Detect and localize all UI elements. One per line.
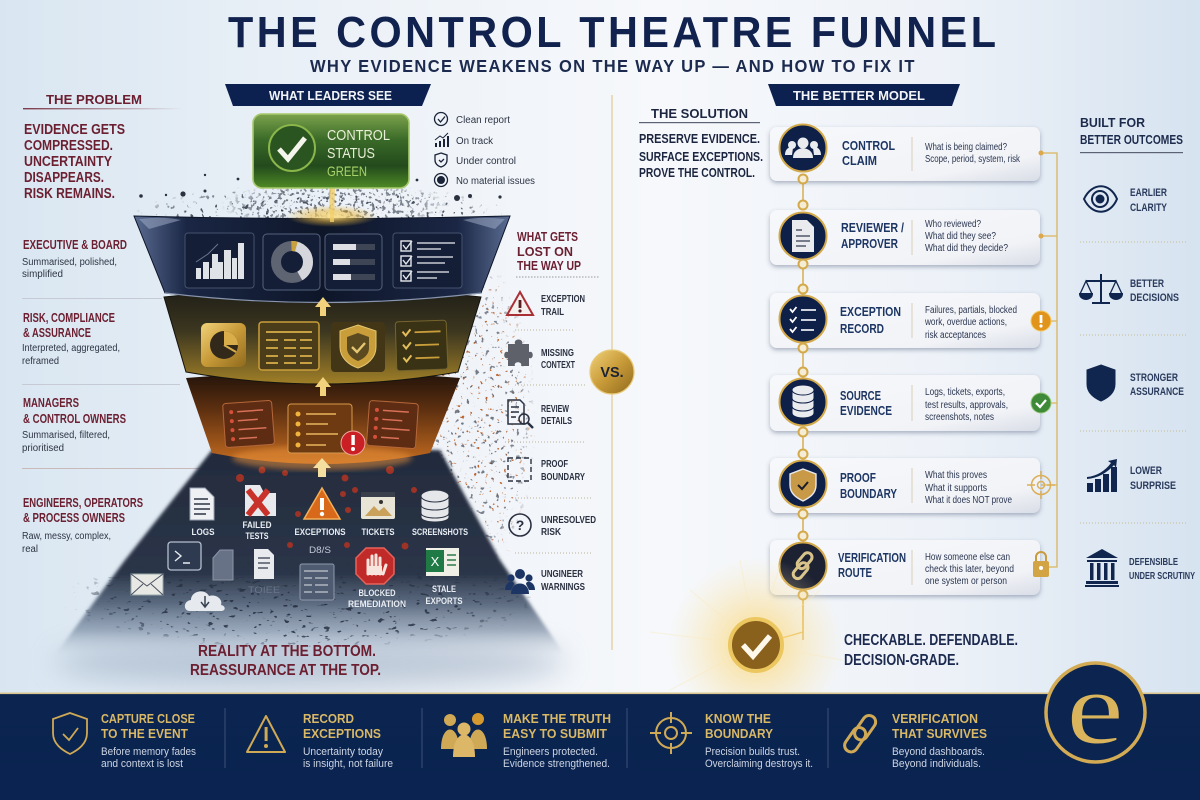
panel: the problem xyxy=(22,92,207,555)
label: stale exports: EXPORTS xyxy=(426,596,462,607)
arrow: upward tier two xyxy=(315,377,331,396)
text: managers and control owners xyxy=(22,396,126,454)
icon: terminal xyxy=(168,542,201,570)
label: missing context xyxy=(541,348,575,371)
heading: the solution: THE SOLUTION xyxy=(651,106,748,121)
text: risk compliance and assurance: & ASSURANCE xyxy=(23,326,91,340)
banner: what leaders see xyxy=(225,84,431,106)
icon: decision-grade gold check xyxy=(650,557,844,733)
label: engineer warnings xyxy=(541,569,585,593)
status card: control status green xyxy=(253,114,409,188)
heading: what gets lost on the way up: WHAT GETS xyxy=(517,230,578,244)
icon: database xyxy=(780,378,826,426)
badge: versus xyxy=(590,350,634,394)
footer item: record exceptions xyxy=(247,711,393,770)
icon: report document xyxy=(254,549,274,579)
step card: control claim: What is being claimed? xyxy=(925,142,1007,153)
label: exception trail xyxy=(541,294,585,318)
icon: exception trail warning xyxy=(507,292,533,315)
label: engineer warnings: WARNINGS xyxy=(541,582,585,593)
icon: warning triangle xyxy=(247,716,285,752)
footer item: verification that survives: THAT SURVIVES xyxy=(892,726,987,741)
panel: gold checklist xyxy=(395,320,448,371)
icon: form list xyxy=(300,564,334,600)
footer item: make the truth easy to submit: Engineers protected. xyxy=(503,746,598,758)
debris: scattered dark specks above funnel xyxy=(139,174,502,201)
footer item: capture close to the event xyxy=(53,711,196,770)
icon: review details document xyxy=(508,400,533,428)
icon: people xyxy=(780,124,826,172)
footer item: make the truth easy to submit: Evidence strengthened. xyxy=(503,758,610,770)
icon: green check badge xyxy=(1031,393,1051,413)
label: lower surprise: LOWER xyxy=(1130,465,1162,477)
heading: what gets lost on the way up: LOST ON xyxy=(517,245,573,259)
debris: dense grey particles under status card xyxy=(222,188,448,218)
step card: control claim xyxy=(770,124,1044,181)
step card: reviewer approver: REVIEWER / xyxy=(841,220,904,235)
logo: gold e xyxy=(1046,651,1145,766)
status card: control status green: GREEN xyxy=(327,163,367,179)
label: failed tests: FAILED xyxy=(242,520,272,531)
footer item: know the boundary: KNOW THE xyxy=(705,711,771,726)
text: checkable defendable decision-grade xyxy=(844,632,1018,669)
step card: source evidence: test results, approvals, xyxy=(925,400,1008,411)
icon: gold padlock xyxy=(1033,552,1049,577)
footer band xyxy=(0,692,1200,800)
label: stale exports: STALE xyxy=(432,584,456,595)
icon: eye xyxy=(1084,186,1117,212)
panel: bar chart xyxy=(185,233,254,288)
step card: source evidence: EVIDENCE xyxy=(840,403,892,418)
label: proof boundary xyxy=(541,459,585,483)
text: risk compliance and assurance: Interpreted, aggregated, xyxy=(22,343,120,354)
heading: what gets lost on the way up: THE WAY UP xyxy=(517,259,581,273)
step card: verification route: ROUTE xyxy=(838,565,872,580)
panel: what gets lost xyxy=(504,230,600,594)
step card: exception record: Failures, partials, blocked xyxy=(925,305,1017,316)
label: proof boundary: BOUNDARY xyxy=(541,472,585,483)
step card: exception record: work, overdue actions, xyxy=(924,317,1007,328)
icon: shield check xyxy=(53,713,87,754)
icon: chain link xyxy=(780,542,826,590)
footer item: capture close to the event: CAPTURE CLOSE xyxy=(101,711,195,726)
step card: exception record: EXCEPTION xyxy=(840,304,901,319)
step card: verification route: one system or person xyxy=(925,576,1007,587)
text: problem statement: DISAPPEARS. xyxy=(24,170,104,186)
icon: engineer warnings people xyxy=(505,569,535,594)
footer item: record exceptions: Uncertainty today xyxy=(303,746,383,758)
label: missing context: CONTEXT xyxy=(541,360,575,371)
text: managers and control owners: prioritised xyxy=(22,443,64,454)
list: leader reassurance signals: Under control xyxy=(456,156,516,167)
icon: gold shield xyxy=(780,460,826,508)
footer item: capture close to the event: and context is lost xyxy=(101,758,183,770)
label: stale exports xyxy=(426,584,462,607)
panel: gold shield xyxy=(331,322,385,372)
step card: control claim: CLAIM xyxy=(842,153,877,168)
text: solution statement: SURFACE EXCEPTIONS. xyxy=(639,150,763,164)
panel: gold table xyxy=(259,322,319,370)
label: better decisions xyxy=(1130,278,1179,304)
icon: no material issues xyxy=(434,174,448,186)
text: engineers operators and process owners: ENGINEERS, OPERATORS xyxy=(23,496,143,510)
panel: donut chart xyxy=(263,234,320,290)
step card: verification route xyxy=(770,540,1049,595)
step card: reviewer approver: Who reviewed? xyxy=(925,219,981,230)
panel: horizontal bars xyxy=(325,234,382,290)
icon: document xyxy=(780,212,826,260)
label: exceptions: EXCEPTIONS xyxy=(294,527,346,538)
banner: what leaders see: WHAT LEADERS SEE xyxy=(269,89,392,103)
list: leader reassurance signals: On track xyxy=(456,136,494,147)
funnel tier: risk and assurance xyxy=(164,288,481,384)
list: leader reassurance signals: No material issues xyxy=(456,176,535,187)
step card: proof boundary: What it supports xyxy=(925,483,987,494)
label: notes: TOIEE xyxy=(248,585,280,595)
label: screenshots: SCREENSHOTS xyxy=(412,527,468,538)
text: solution statement xyxy=(639,132,763,180)
text: engineers operators and process owners: real xyxy=(22,544,38,555)
label: engineer warnings: UNGINEER xyxy=(541,569,584,580)
icon: missing context puzzle xyxy=(504,340,533,366)
icon: tickets image xyxy=(361,492,395,519)
label: proof boundary: PROOF xyxy=(541,459,568,470)
step card: exception record: risk acceptances xyxy=(925,330,986,341)
text: checkable defendable decision-grade: CHECKABLE. DEFENDABLE. xyxy=(844,632,1018,649)
icon: warning badge xyxy=(1031,311,1051,331)
text: problem statement: UNCERTAINTY xyxy=(24,154,112,170)
step card: verification route: How someone else can xyxy=(925,552,1010,563)
label: stronger assurance: STRONGER xyxy=(1130,372,1178,384)
debris: orange particles escaping funnel xyxy=(432,270,535,560)
text: problem statement: EVIDENCE GETS xyxy=(24,122,125,138)
icon: excel file: X xyxy=(431,554,440,569)
label: exception trail: EXCEPTION xyxy=(541,294,585,305)
label: blocked remediation xyxy=(348,588,406,610)
footer item: make the truth easy to submit: MAKE THE TRUTH xyxy=(503,711,611,726)
banner: the better model xyxy=(768,84,960,106)
text: managers and control owners: & CONTROL OWNERS xyxy=(23,412,126,426)
label: stronger assurance xyxy=(1130,372,1184,398)
icon: cloud download xyxy=(185,591,225,611)
step card: proof boundary: What this proves xyxy=(925,470,987,481)
text: executive and board: simplified xyxy=(22,269,63,280)
heading: built for better outcomes xyxy=(1080,116,1183,147)
text: managers and control owners: MANAGERS xyxy=(23,396,79,410)
label: review details: REVIEW xyxy=(541,404,569,415)
panel: built for better outcomes xyxy=(1080,116,1195,587)
panel: manager list left xyxy=(223,400,275,448)
arrow: up flow beam xyxy=(286,188,378,227)
step card: source evidence: SOURCE xyxy=(840,388,881,403)
text: problem statement: COMPRESSED. xyxy=(24,138,113,154)
icon: logs xyxy=(190,488,214,520)
text: risk compliance and assurance: RISK, COMPLIANCE xyxy=(23,311,115,325)
status card: control status green: STATUS xyxy=(327,146,375,162)
footer item: capture close to the event: TO THE EVENT xyxy=(101,726,188,741)
outcome connector: right gold rail xyxy=(1041,153,1057,567)
step card: control claim: CONTROL xyxy=(842,138,895,153)
icon: proof boundary dashed square xyxy=(508,458,531,481)
panel: the solution xyxy=(639,106,763,180)
panel: gold pie chart xyxy=(201,323,246,367)
label: better decisions: BETTER xyxy=(1130,278,1164,290)
step card: source evidence: Logs, tickets, exports, xyxy=(925,387,1005,398)
step card: source evidence xyxy=(770,375,1051,431)
text: executive and board: EXECUTIVE & BOARD xyxy=(23,238,127,252)
icon: target xyxy=(650,712,692,754)
debris: dark particles escaping funnel xyxy=(436,276,534,556)
footer item: know the boundary xyxy=(650,711,813,770)
label: failed tests xyxy=(242,520,272,542)
label: defensible under scrutiny xyxy=(1129,557,1195,582)
text: executive and board xyxy=(22,238,127,280)
label: exception trail: TRAIL xyxy=(541,307,564,318)
step card: reviewer approver xyxy=(770,210,1044,265)
step card: proof boundary: PROOF xyxy=(840,470,876,485)
status card: control status green: CONTROL xyxy=(327,128,390,144)
step card: reviewer approver: APPROVER xyxy=(841,236,898,251)
step card: exception record xyxy=(770,293,1051,348)
heading: the problem: THE PROBLEM xyxy=(46,92,142,107)
panel: checklist xyxy=(393,233,462,288)
icon: stronger shield xyxy=(1087,365,1115,401)
text: engineers operators and process owners xyxy=(22,496,143,555)
label: lower surprise xyxy=(1130,465,1176,492)
footer item: know the boundary: Precision builds trust. xyxy=(705,746,800,758)
text: engineers operators and process owners: & PROCESS OWNERS xyxy=(23,511,125,525)
footer item: verification that survives: Beyond individuals. xyxy=(892,758,981,770)
footer item: record exceptions: EXCEPTIONS xyxy=(303,726,381,741)
footer item: make the truth easy to submit xyxy=(441,711,611,770)
label: failed tests: TESTS xyxy=(246,531,268,542)
label: unresolved risk: RISK xyxy=(541,527,562,538)
label: earlier clarity: EARLIER xyxy=(1130,187,1167,199)
step card: reviewer approver: What did they see? xyxy=(925,231,996,242)
subtitle: WHY EVIDENCE WEAKENS ON THE WAY UP — AND HOW TO FIX IT xyxy=(310,55,915,76)
step card: verification route: VERIFICATION xyxy=(838,550,906,565)
footer item: know the boundary: BOUNDARY xyxy=(705,726,773,741)
banner: the better model: THE BETTER MODEL xyxy=(793,89,925,103)
icon: failed tests xyxy=(245,485,276,516)
label: unresolved risk: UNRESOLVED xyxy=(541,515,596,526)
logo: gold e: e xyxy=(1066,651,1124,766)
text: executive and board: Summarised, polished, xyxy=(22,257,117,268)
icon: blocked stop hand xyxy=(356,548,394,584)
icon: checklist xyxy=(780,296,826,342)
funnel tier: executive and board xyxy=(134,216,510,302)
icon: excel file xyxy=(426,548,459,576)
icon: clean report xyxy=(434,112,448,126)
debris: evidence particles above funnel xyxy=(136,188,502,218)
step card: exception record: RECORD xyxy=(840,321,884,336)
label: missing context: MISSING xyxy=(541,348,574,359)
funnel xyxy=(55,188,565,688)
footer item: capture close to the event: Before memory fades xyxy=(101,746,196,758)
footer item: verification that survives xyxy=(842,711,987,770)
icon: document xyxy=(213,550,233,580)
list: leader reassurance signals: Clean report xyxy=(456,115,510,126)
caption: reality at the bottom xyxy=(190,643,381,679)
step card: reviewer approver: What did they decide? xyxy=(925,243,1008,254)
icon: under control xyxy=(435,153,447,167)
step card: proof boundary: What it does NOT prove xyxy=(925,495,1012,506)
chain knots: gold connectors xyxy=(798,174,808,600)
text: solution statement: PROVE THE CONTROL. xyxy=(639,166,755,180)
icon: institution building xyxy=(1085,549,1119,587)
footer item: record exceptions: RECORD xyxy=(303,711,354,726)
text: problem statement xyxy=(24,122,125,202)
icon: on track xyxy=(435,133,449,147)
label: unresolved risk xyxy=(541,515,596,538)
caption: reality at the bottom: REALITY AT THE BOTTOM. xyxy=(198,643,376,660)
step card: control claim: Scope, period, system, risk xyxy=(925,154,1021,165)
icon: chain link xyxy=(842,713,878,754)
label: blocked remediation: REMEDIATION xyxy=(348,599,406,610)
label: logs: LOGS xyxy=(192,527,214,538)
icon: email envelope xyxy=(131,574,163,595)
reality layer: raw evidence pyramid xyxy=(55,450,565,688)
arrow: upward tier one xyxy=(315,297,331,316)
caption: reality at the bottom: REASSURANCE AT THE TOP. xyxy=(190,662,381,679)
icon: people group xyxy=(441,713,487,757)
funnel tier: managers xyxy=(186,372,460,470)
footer item: make the truth easy to submit: EASY TO SUBMIT xyxy=(503,726,607,741)
panel: manager list centre xyxy=(288,404,352,453)
text: managers and control owners: Summarised, filtered, xyxy=(22,430,110,441)
text: problem statement: RISK REMAINS. xyxy=(24,186,115,202)
footer item: verification that survives: Beyond dashboards. xyxy=(892,746,985,758)
step card: verification route: check this later, beyond xyxy=(925,564,1014,575)
icon: balance scales xyxy=(1080,274,1122,303)
label: better decisions: DECISIONS xyxy=(1130,292,1179,304)
label: tickets: TICKETS xyxy=(362,527,394,538)
icon: red alert badge xyxy=(341,431,365,455)
icon: unresolved risk question: ? xyxy=(516,517,524,533)
text: engineers operators and process owners: Raw, messy, complex, xyxy=(22,531,111,542)
chain connector: vertical links xyxy=(775,170,803,640)
label: blocked remediation: BLOCKED xyxy=(358,588,396,599)
icon: unresolved risk question xyxy=(509,514,531,536)
label: stronger assurance: ASSURANCE xyxy=(1130,386,1184,398)
footer item: verification that survives: VERIFICATION xyxy=(892,711,978,726)
divider: versus line xyxy=(611,95,613,650)
step card: proof boundary: BOUNDARY xyxy=(840,486,897,501)
icon: screenshots database xyxy=(421,490,449,522)
label: dbs: D8/S xyxy=(309,545,331,556)
label: earlier clarity: CLARITY xyxy=(1130,202,1168,214)
step card: proof boundary xyxy=(770,458,1055,513)
label: lower surprise: SURPRISE xyxy=(1130,480,1176,492)
panel: manager list right xyxy=(366,400,418,449)
label: earlier clarity xyxy=(1130,187,1168,214)
text: risk compliance and assurance xyxy=(22,311,120,367)
icon: exception triangle xyxy=(304,488,340,519)
text: checkable defendable decision-grade: DECISION-GRADE. xyxy=(844,652,959,669)
badge: versus: VS. xyxy=(600,365,624,381)
label: defensible under scrutiny: DEFENSIBLE xyxy=(1129,557,1178,568)
list: leader reassurance signals xyxy=(434,112,535,187)
label: review details: DETAILS xyxy=(541,416,572,427)
footer item: know the boundary: Overclaiming destroys it. xyxy=(705,758,813,770)
heading: built for better outcomes: BUILT FOR xyxy=(1080,116,1145,130)
arrow: upward tier three xyxy=(313,458,331,477)
text: risk compliance and assurance: reframed xyxy=(22,356,59,367)
icon: rising bars xyxy=(1087,459,1117,492)
text: solution statement: PRESERVE EVIDENCE. xyxy=(639,132,760,146)
step card: source evidence: screenshots, notes xyxy=(925,412,994,423)
footer item: record exceptions: is insight, not failure xyxy=(303,758,393,770)
icon: gold target xyxy=(1027,471,1055,499)
title: THE CONTROL THEATRE FUNNEL xyxy=(228,8,996,57)
label: review details xyxy=(541,404,572,427)
heading: what gets lost on the way up xyxy=(517,230,581,273)
